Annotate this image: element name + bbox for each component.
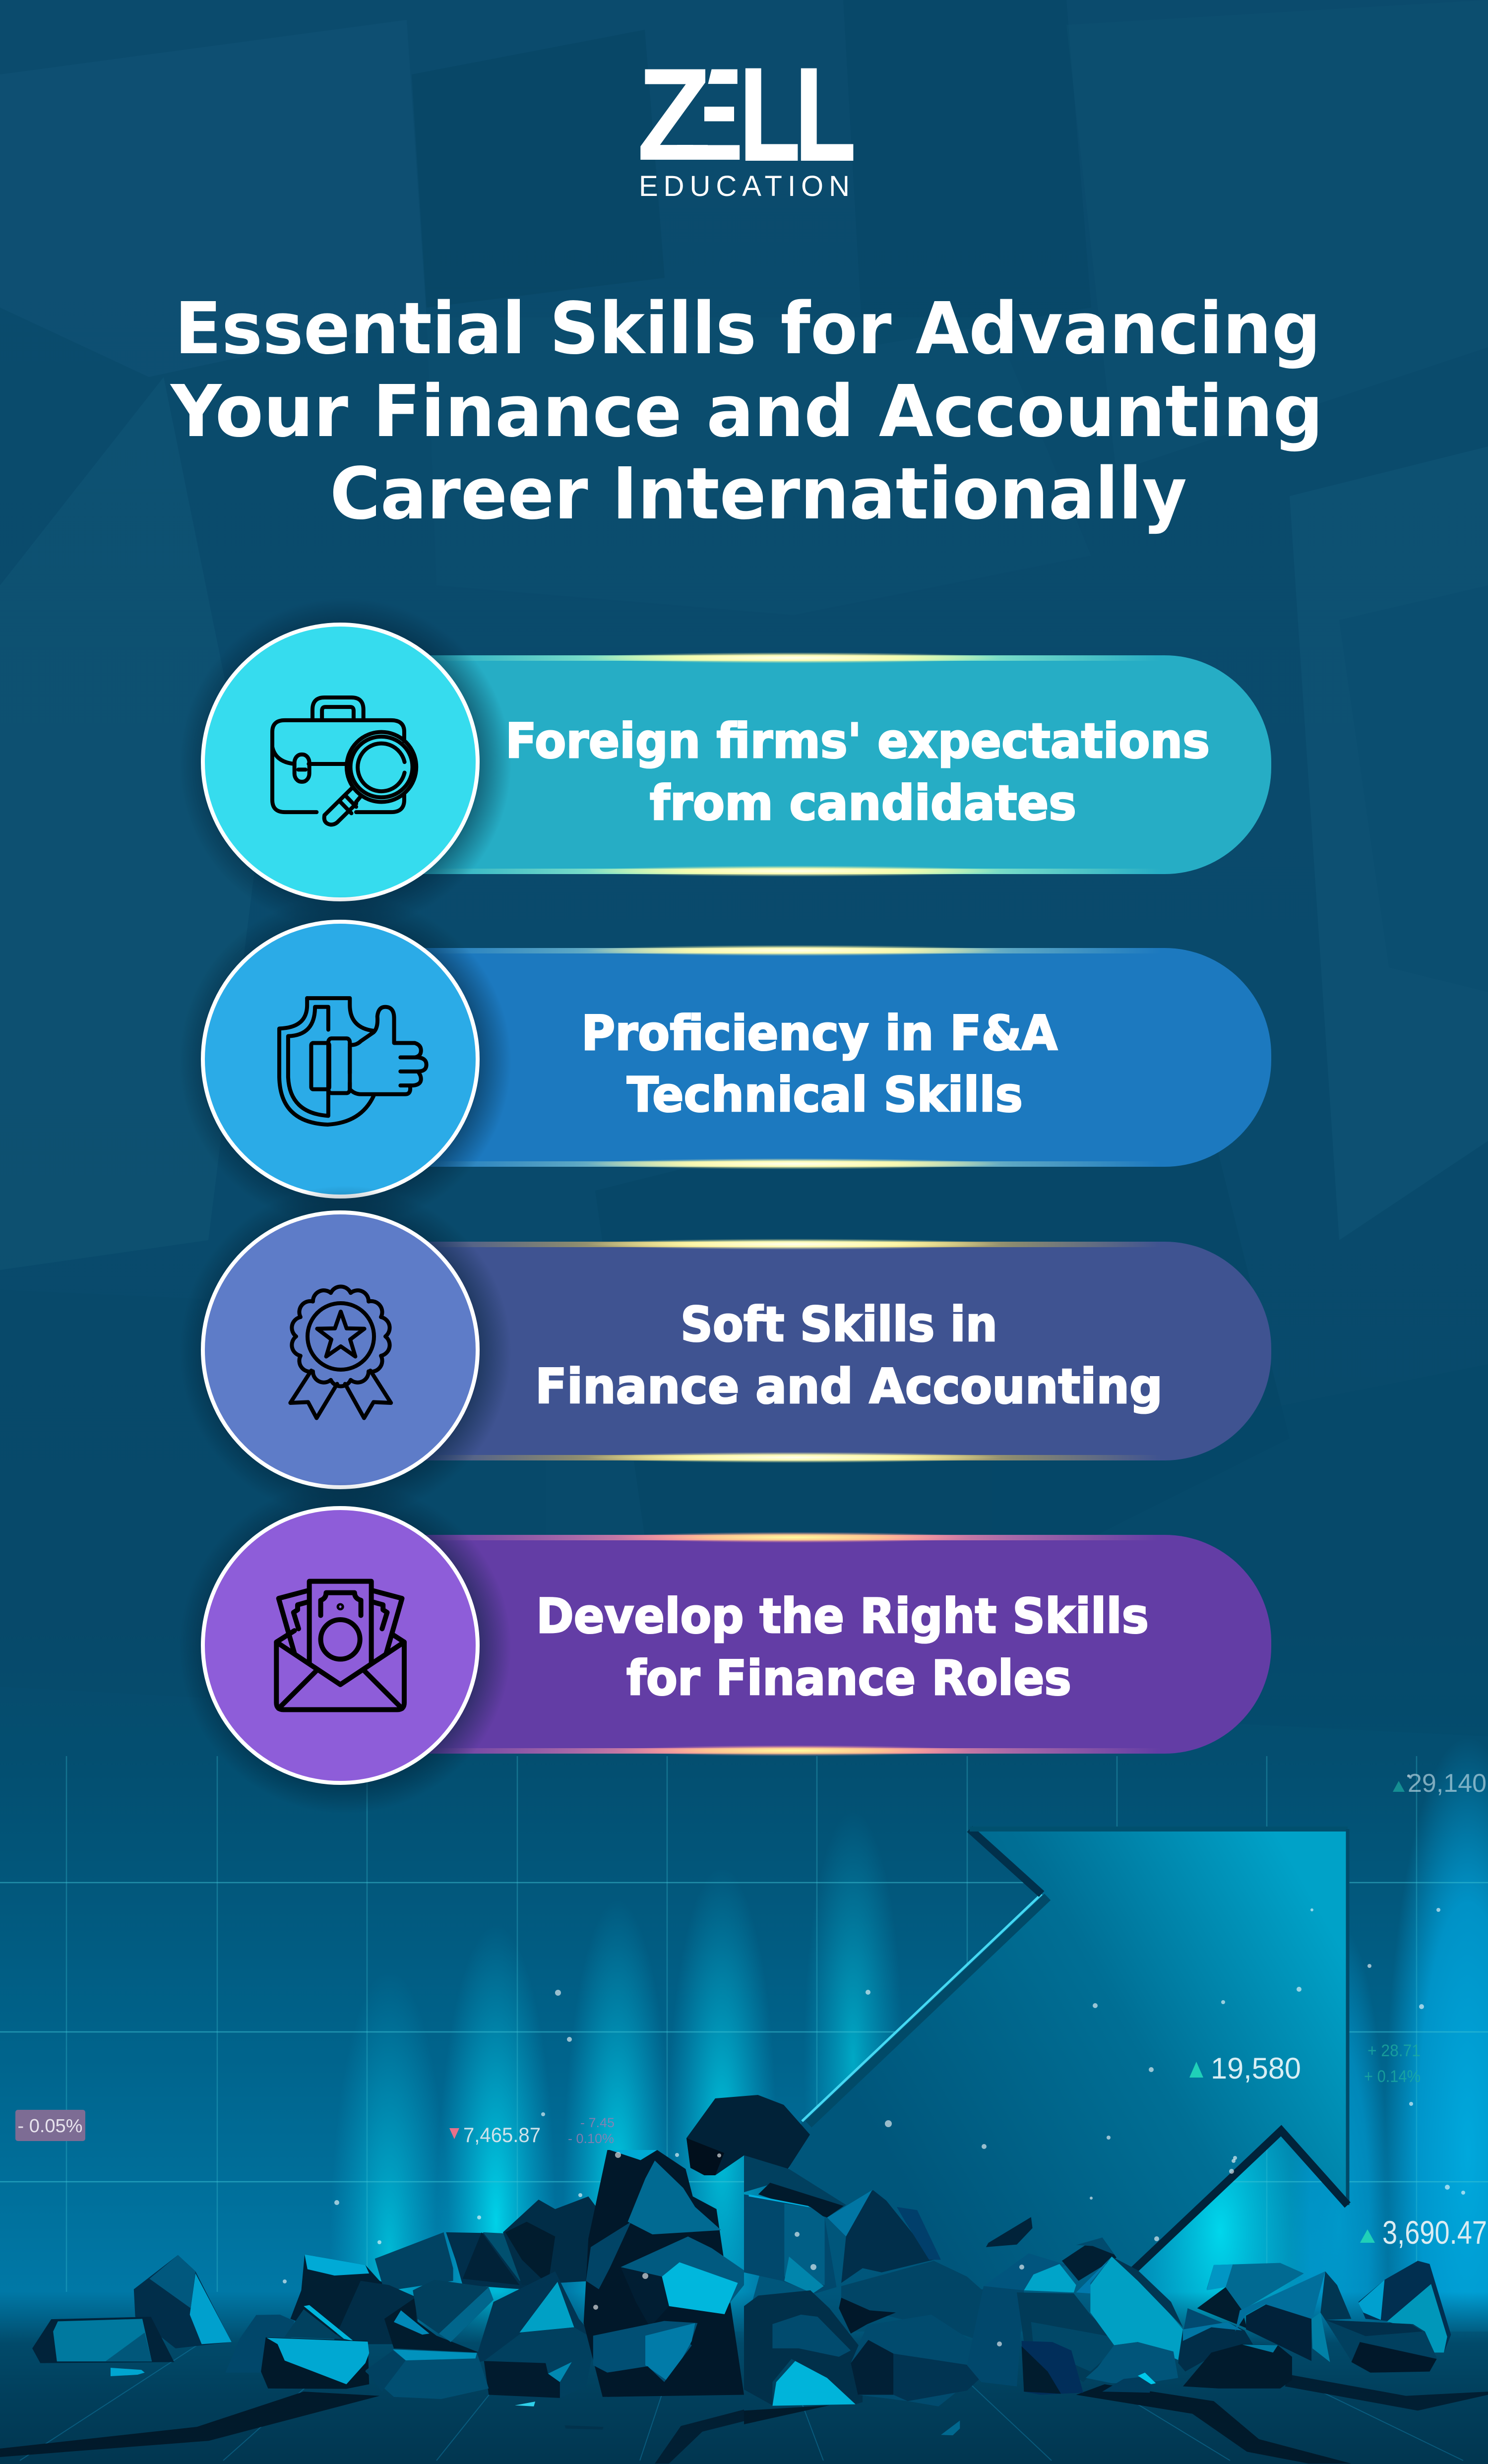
glow lines 1 (427, 652, 1161, 877)
sparkle particles (283, 1774, 1465, 2346)
pill text 2: Proficiency in F&A (581, 1006, 1057, 1061)
label: 7,465.87: 7,465.87 (463, 2123, 541, 2147)
pill text 4: Develop the Right Skills (536, 1588, 1149, 1644)
label: pink change values: - 0.10% (568, 2131, 614, 2146)
label: 29,140: 29,140 (1408, 1769, 1487, 1798)
logo subtitle: EDUCATION: EDUCATION (639, 170, 850, 202)
chart grid lines (0, 1756, 1488, 2292)
icon circle 2 (203, 922, 478, 1197)
icon shadow 4 (179, 1481, 511, 1814)
logo: Zell Education (640, 68, 853, 196)
pill text 2: Technical Skills (627, 1067, 1023, 1123)
title (170, 287, 1323, 535)
panel: Soft Skills in Finance and Accounting (179, 1186, 1271, 1518)
label: green change values (1364, 2041, 1421, 2086)
pill text 4: for Finance Roles (626, 1650, 1071, 1706)
title: Your Finance and Accounting (170, 370, 1323, 453)
pill bar 1 (298, 655, 1271, 874)
pill text 1: Foreign firms' expectations (505, 713, 1210, 769)
arrow: upward arrow shape (744, 1829, 1348, 2332)
title: Essential Skills for Advancing (175, 287, 1321, 370)
icon: envelope with banknotes (276, 1581, 404, 1709)
pill bar 3 (298, 1242, 1271, 1460)
rock pile: left half (32, 2150, 744, 2430)
icon shadow 2 (179, 895, 511, 1227)
icon: award rosette with star (290, 1286, 391, 1418)
logo wordmark: ZELL: E (670, 41, 744, 188)
icon shadow 1 (179, 598, 511, 930)
pill text 3: Soft Skills in (681, 1297, 997, 1352)
logo wordmark: ZELL: Z (637, 41, 711, 188)
light columns behind chart (330, 1736, 1488, 2456)
label: -0.05% box (15, 2110, 85, 2141)
floor with cracks (0, 2292, 1488, 2464)
icon: briefcase with magnifier (272, 697, 416, 824)
pill bar 2 (298, 948, 1271, 1167)
label: -0.05% box: - 0.05% (18, 2116, 82, 2137)
pill text 1: from candidates (650, 775, 1076, 831)
logo wordmark: ZELL (640, 68, 853, 161)
glow lines 4 (427, 1532, 1161, 1756)
pill text 1 (505, 713, 1210, 831)
logo wordmark: ZELL: L (740, 41, 800, 188)
label: 19,580: 19,580 (1211, 2052, 1301, 2085)
icon circle 3 (203, 1212, 478, 1487)
label: green change values: + 28.71 (1367, 2041, 1421, 2060)
label: pink change values: - 7.45 (580, 2115, 615, 2130)
panel: Proficiency in F&A Technical Skills (179, 895, 1271, 1227)
glow lines 2 (427, 945, 1161, 1169)
pill bar 4 (298, 1535, 1271, 1754)
rock pile: right half (744, 2155, 1451, 2435)
pill text 3: Finance and Accounting (535, 1359, 1163, 1414)
panel: Foreign firms' expectations from candidates (179, 598, 1271, 930)
chart value labels (15, 1769, 1487, 2251)
rock pile: top boulder (686, 2095, 810, 2175)
icon shadow 3 (179, 1186, 511, 1518)
pill text 2 (581, 1006, 1057, 1123)
icon circle 4 (203, 1508, 478, 1783)
pill text 3 (535, 1297, 1163, 1414)
icon circle 1 (203, 625, 478, 899)
label: green change values: + 0.14% (1364, 2067, 1421, 2086)
panel: Develop the Right Skills for Finance Roles (179, 1481, 1271, 1814)
logo wordmark: ZELL: L (795, 41, 856, 188)
glow lines 3 (427, 1239, 1161, 1463)
label: pink change values (568, 2115, 615, 2146)
icon: shield with thumbs up (279, 998, 427, 1125)
title: Career Internationally (330, 452, 1187, 535)
pill text 4 (536, 1588, 1149, 1706)
